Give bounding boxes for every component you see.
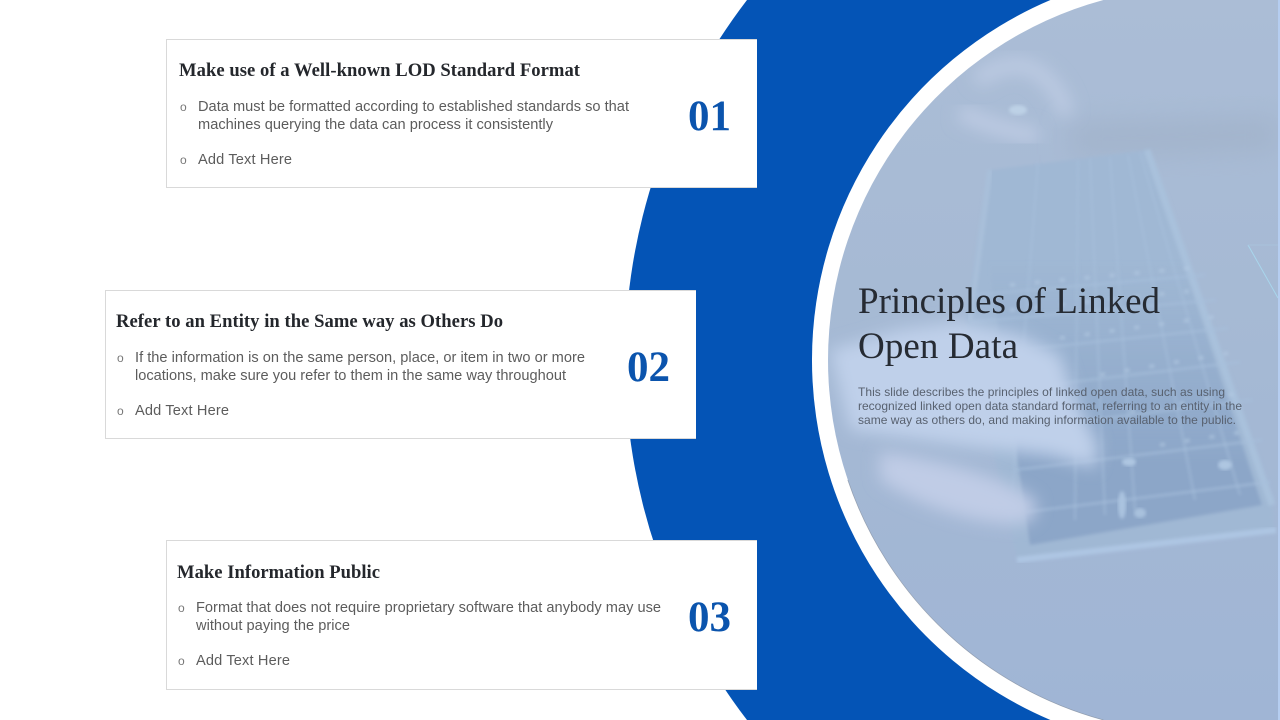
card 2 bullet 1: o — [117, 351, 124, 365]
title: Open Data — [858, 326, 1018, 367]
photo: hands on keyboard — [820, 0, 1280, 720]
card 3 bullet 2: Add Text Here — [196, 653, 290, 669]
card 3 bullet 1: Format that does not require proprietary software that anybody may use — [196, 600, 661, 616]
number 03: 03 — [688, 594, 731, 641]
card 3 bullet 1: o — [178, 601, 185, 615]
card 3 heading: Make Information Public — [177, 562, 380, 583]
card 1 bullet 1: Data must be formatted according to established standards so that — [198, 99, 629, 115]
card 2 bullet 2: Add Text Here — [135, 403, 229, 419]
card 3 bullet 2: o — [178, 654, 185, 668]
card 2 bullet 1: locations, make sure you refer to them in the same way throughout — [135, 368, 566, 384]
card 1 bullet 1: o — [180, 100, 187, 114]
card 2 — [105, 290, 696, 439]
card 3 bullet 1 — [178, 600, 661, 634]
title — [858, 281, 1160, 367]
card 1 bullet 2: Add Text Here — [198, 152, 292, 168]
card 1 bullet 1 — [180, 99, 629, 133]
white ring — [812, 0, 1280, 720]
card 1 bullet 1: machines querying the data can process it consistently — [198, 117, 554, 133]
card 2 bullet 1 — [117, 350, 585, 384]
title: Principles of Linked — [858, 281, 1160, 322]
number 02: 02 — [627, 344, 670, 391]
number 01: 01 — [688, 93, 731, 140]
card 1 heading: Make use of a Well-known LOD Standard Format — [179, 60, 581, 81]
card 2 heading: Refer to an Entity in the Same way as Others Do — [116, 311, 503, 332]
description: recognized linked open data standard format, referring to an entity in the — [858, 399, 1242, 413]
card 3 — [166, 540, 757, 690]
description: same way as others do, and making information available to the public. — [858, 413, 1236, 427]
card 2 bullet 2: o — [117, 404, 124, 418]
description: This slide describes the principles of linked open data, such as using — [858, 385, 1225, 399]
card 3 bullet 1: without paying the price — [195, 618, 350, 634]
card 1 — [166, 39, 757, 188]
image edge shadow — [848, 480, 1103, 720]
card 1 bullet 2: o — [180, 153, 187, 167]
card 2 bullet 1: If the information is on the same person, place, or item in two or more — [135, 350, 585, 366]
description — [858, 385, 1242, 427]
blue circle — [625, 0, 1280, 720]
